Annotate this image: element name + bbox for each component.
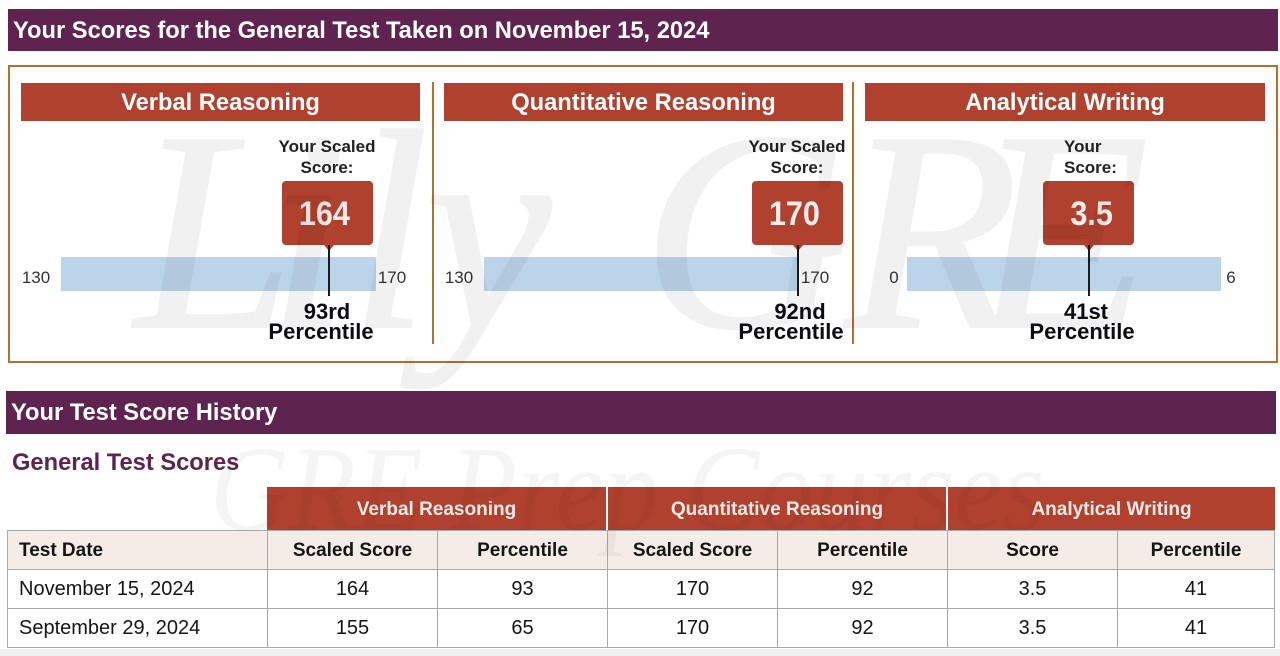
score badge: 3.5 [1070, 195, 1113, 233]
score badge [752, 181, 843, 245]
score label [1064, 137, 1117, 177]
divider [432, 82, 434, 344]
watermark: GRE Prep Courses [210, 422, 1045, 557]
table header: verbal [267, 487, 606, 530]
score label [748, 137, 846, 177]
score badge [282, 181, 373, 245]
marker [797, 245, 799, 296]
row: September 29, 2024: 41 [1185, 617, 1207, 639]
column header row: Scaled Score [293, 540, 412, 561]
section: analytical writing [865, 83, 1265, 344]
column header row: Test Date [19, 540, 103, 561]
row: September 29, 2024: 170 [676, 617, 709, 639]
score label [278, 137, 376, 177]
column header row [7, 530, 1275, 569]
percentile [268, 299, 374, 344]
range max: 170 [378, 268, 406, 287]
score range bar [907, 257, 1221, 291]
section: quantitative reasoning [444, 83, 846, 344]
history band [6, 391, 1276, 434]
row: September 29, 2024 [7, 609, 1275, 648]
percentile [1029, 299, 1135, 344]
row: September 29, 2024: 155 [336, 617, 369, 639]
score label: Your [1064, 137, 1101, 156]
row: November 15, 2024: 93 [511, 578, 534, 600]
row: November 15, 2024 [7, 570, 1275, 608]
percentile: Percentile [1029, 319, 1135, 344]
percentile: 92nd [774, 299, 826, 324]
percentile: Percentile [268, 319, 374, 344]
heading: Quantitative Reasoning [511, 90, 776, 116]
column header row: Percentile [817, 540, 908, 561]
table header: writing [948, 487, 1275, 530]
marker [1088, 245, 1090, 296]
row: November 15, 2024: 92 [851, 578, 874, 600]
range min: 0 [889, 268, 899, 287]
table header: quantitative [608, 487, 946, 530]
row: November 15, 2024: 3.5 [1019, 578, 1046, 600]
badge pointer [793, 245, 803, 251]
row: September 29, 2024: 3.5 [1019, 617, 1046, 639]
score range bar [484, 257, 799, 291]
heading [865, 83, 1265, 121]
score range bar [61, 257, 376, 291]
bottom edge [0, 649, 1280, 656]
table header: quantitative: Quantitative Reasoning [671, 499, 883, 520]
percentile: 41st [1064, 299, 1108, 324]
row: September 29, 2024: 65 [511, 617, 534, 639]
score badge: 164 [299, 195, 350, 233]
watermark: LilyGRE [131, 73, 1149, 389]
percentile: 93rd [304, 299, 350, 324]
table header: verbal: Verbal Reasoning [357, 499, 516, 520]
panel: current scores [8, 65, 1278, 363]
badge pointer [1084, 245, 1094, 251]
score badge [1043, 181, 1134, 245]
column header row: Score [1006, 540, 1059, 561]
percentile: Percentile [738, 319, 844, 344]
score label: Your Scaled [748, 137, 846, 156]
section: verbal reasoning [21, 83, 420, 344]
table header: writing: Analytical Writing [1031, 499, 1192, 520]
column header row: Percentile [1151, 540, 1241, 561]
score label: Score: [771, 158, 823, 177]
badge pointer [324, 245, 334, 251]
row: September 29, 2024: 92 [851, 617, 874, 639]
percentile [738, 299, 844, 344]
row: November 15, 2024: 170 [676, 578, 709, 600]
row: November 15, 2024: 164 [336, 578, 369, 600]
range max: 6 [1226, 268, 1236, 287]
title band: Your Scores for the General Test Taken on November 15, 2024 [13, 18, 709, 44]
history band: Your Test Score History [11, 400, 277, 426]
subheading: General Test Scores [12, 450, 239, 476]
range max: 170 [801, 268, 829, 287]
heading [21, 83, 420, 121]
marker [328, 245, 330, 296]
score table [7, 487, 1275, 648]
row: November 15, 2024: 41 [1185, 578, 1207, 600]
heading: Analytical Writing [965, 90, 1165, 116]
score label: Score: [1064, 158, 1117, 177]
score badge: 170 [769, 195, 820, 233]
score label: Your Scaled [278, 137, 376, 156]
heading [444, 83, 843, 121]
score label: Score: [301, 158, 353, 177]
row: November 15, 2024: November 15, 2024 [19, 578, 195, 600]
range min: 130 [445, 268, 473, 287]
row: September 29, 2024: September 29, 2024 [19, 617, 200, 639]
divider [852, 82, 854, 344]
title band [8, 9, 1278, 51]
column header row: Scaled Score [633, 540, 752, 561]
range min: 130 [22, 268, 50, 287]
heading: Verbal Reasoning [121, 90, 320, 116]
column header row: Percentile [477, 540, 568, 561]
